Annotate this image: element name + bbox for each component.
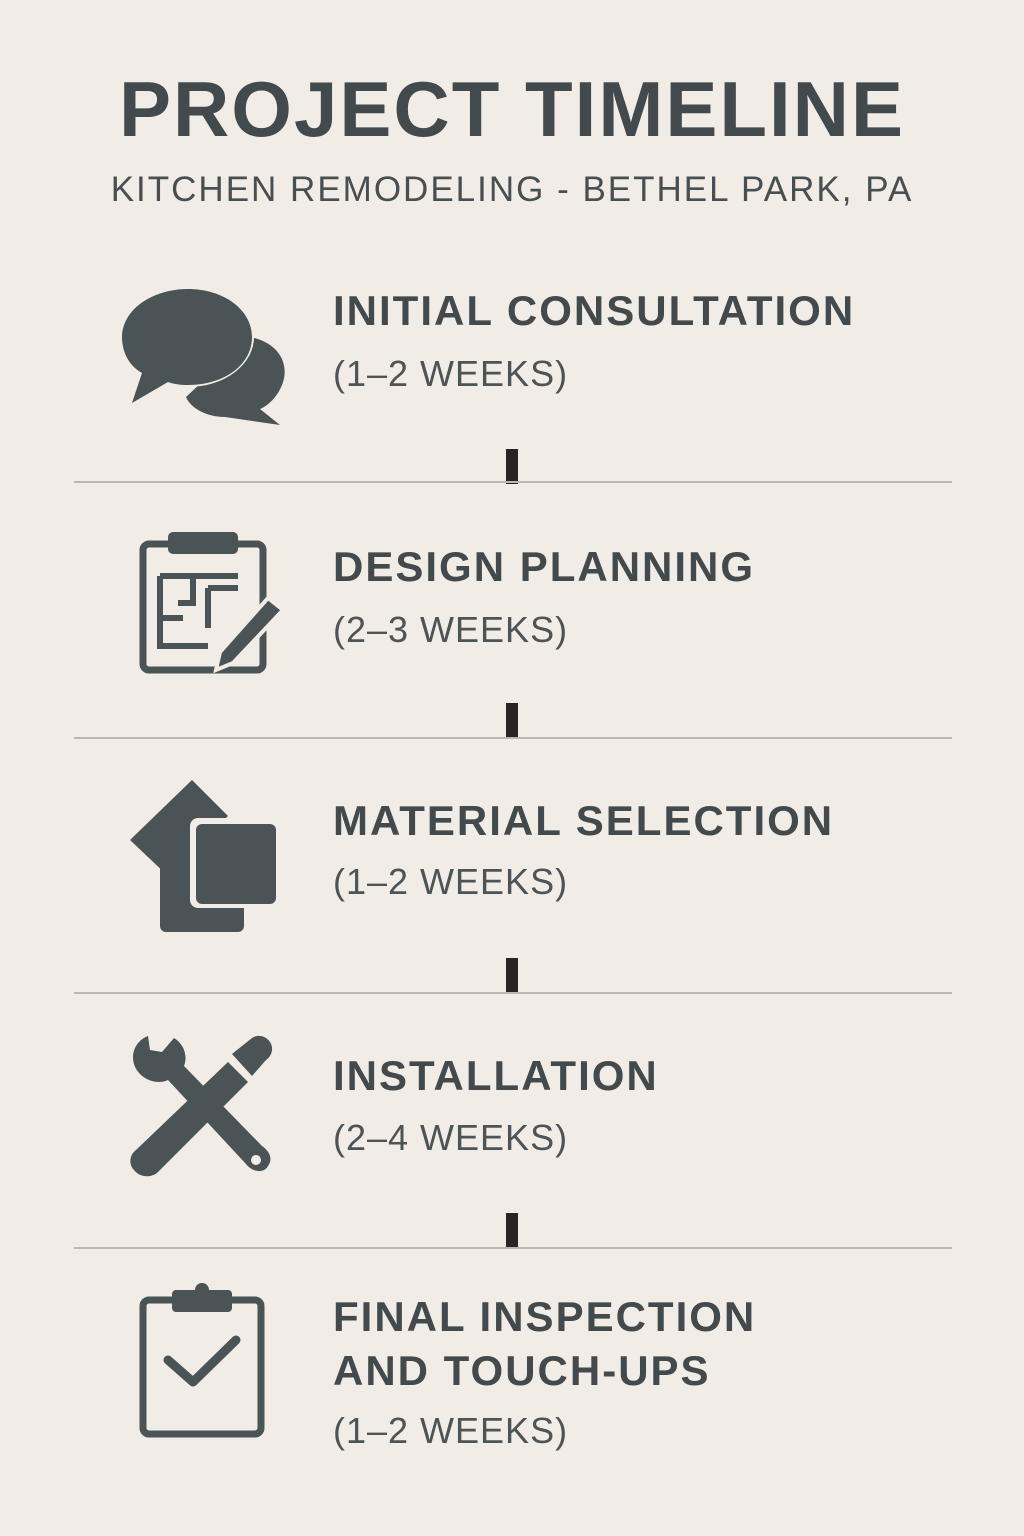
- duration: (1–2 WEEKS): [333, 861, 568, 902]
- icon: speech bubbles: [122, 289, 285, 425]
- step 5: final inspection: [140, 1283, 756, 1451]
- icon: wrench and screwdriver: [130, 1036, 272, 1176]
- title: PROJECT TIMELINE: [119, 65, 905, 153]
- duration: (1–2 WEEKS): [333, 353, 568, 394]
- icon: material samples: [130, 780, 276, 932]
- duration: (1–2 WEEKS): [333, 1410, 568, 1451]
- heading: [333, 1293, 756, 1394]
- heading: AND TOUCH-UPS: [333, 1347, 711, 1394]
- step 1: initial consultation: [122, 287, 855, 425]
- step 2: design planning: [140, 532, 755, 674]
- duration: (2–4 WEEKS): [333, 1117, 568, 1158]
- heading: INSTALLATION: [333, 1052, 659, 1099]
- step 4: installation: [130, 1036, 659, 1176]
- icon: clipboard with floor plan and pencil: [140, 532, 280, 674]
- heading: FINAL INSPECTION: [333, 1293, 756, 1340]
- heading: DESIGN PLANNING: [333, 543, 755, 590]
- subtitle: KITCHEN REMODELING - BETHEL PARK, PA: [111, 170, 913, 209]
- duration: (2–3 WEEKS): [333, 609, 568, 650]
- icon: clipboard check: [140, 1283, 264, 1438]
- heading: INITIAL CONSULTATION: [333, 287, 855, 334]
- heading: MATERIAL SELECTION: [333, 797, 834, 844]
- step 3: material selection: [130, 780, 834, 932]
